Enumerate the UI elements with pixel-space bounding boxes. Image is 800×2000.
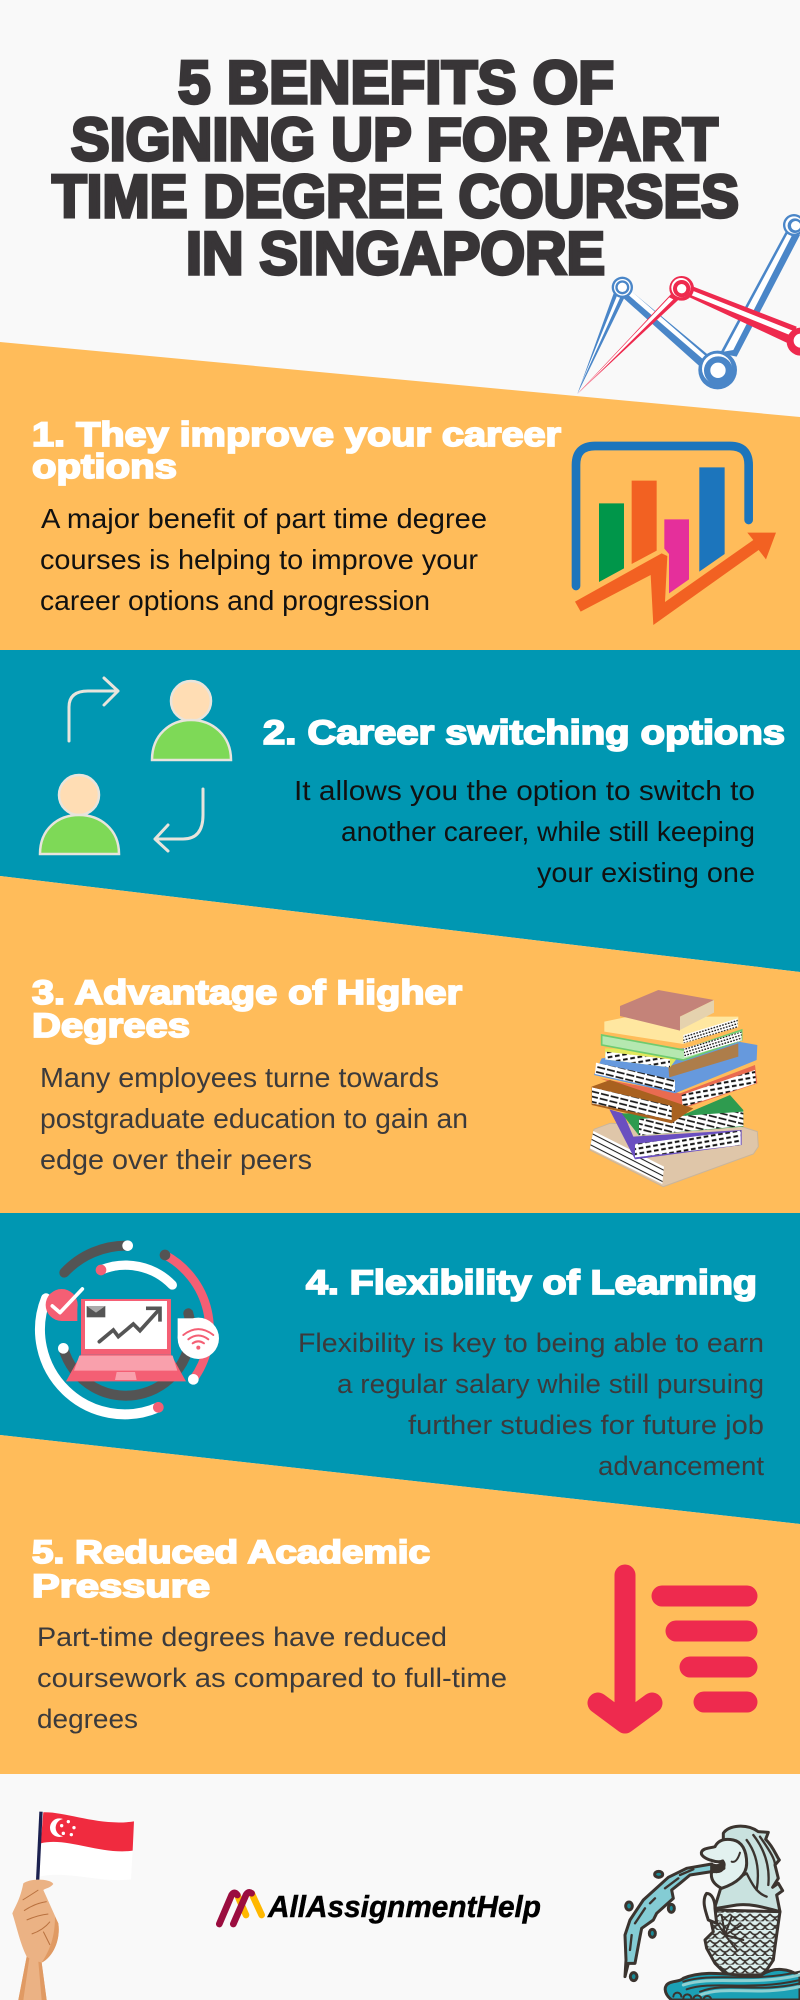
icon: logo mark (219, 1892, 262, 1924)
heading: benefit 5 (32, 1534, 430, 1604)
red nodes (669, 276, 800, 356)
waves (665, 1969, 800, 2000)
logo: AllAssignmentHelp (219, 1889, 541, 1924)
text: benefit 2 description (294, 775, 755, 888)
text: benefit 2 description: It allows you the option to switch to (294, 775, 755, 806)
panel: benefit 2 career switching (0, 650, 800, 972)
heading: benefit 3 (32, 974, 462, 1045)
footer (0, 1774, 800, 2000)
icon: laptop with growth chart (40, 1240, 219, 1414)
face (701, 1839, 747, 1888)
text: benefit 1 description: A major benefit of part time degree (41, 503, 487, 534)
mane (715, 1826, 783, 1912)
heading: benefit 1: 1. They improve your career (32, 416, 561, 454)
panel: benefit 4 flexibility (0, 1213, 800, 1524)
panel: benefit 1 career options (0, 342, 800, 650)
icon: stack of books (590, 990, 758, 1187)
icon: down arrow with shrinking bars (598, 1575, 747, 1723)
text: benefit 2 description: your existing one (537, 857, 755, 888)
text: benefit 3 description: Many employees turne towards (40, 1062, 439, 1093)
water stream (625, 1864, 712, 1977)
text: benefit 5 description: degrees (37, 1704, 138, 1734)
icon: wifi badge (178, 1318, 219, 1359)
heading: benefit 3: 3. Advantage of Higher (32, 974, 462, 1012)
text: benefit 1 description (40, 503, 487, 616)
title (52, 49, 739, 287)
fish body with scales (704, 1893, 780, 1975)
text: logo wordmark: AllAssignmentHelp (267, 1889, 541, 1924)
heading: benefit 4: 4. Flexibility of Learning (306, 1264, 757, 1302)
text: benefit 5 description: Part-time degrees have reduced (37, 1622, 447, 1652)
blue nodes (612, 214, 800, 389)
icon: bar chart with rising arrow (575, 446, 776, 625)
text: benefit 3 description: postgraduate education to gain an (40, 1103, 468, 1134)
icon: network line chart (577, 214, 800, 394)
heading: benefit 5: 5. Reduced Academic (32, 1534, 430, 1570)
heading: benefit 5: Pressure (32, 1568, 210, 1604)
water drops (626, 1871, 674, 1981)
text: benefit 4 description: further studies for future job (408, 1410, 764, 1440)
text: benefit 4 description (298, 1328, 765, 1481)
text: benefit 3 description: edge over their peers (40, 1144, 312, 1175)
panel: benefit 3 higher degrees (0, 876, 800, 1213)
heading: benefit 1: options (32, 448, 177, 486)
title: SIGNING UP FOR PART (71, 106, 718, 173)
heading: benefit 3: Degrees (32, 1007, 190, 1045)
icon: check badge (46, 1289, 82, 1321)
icon: Merlion statue (625, 1826, 800, 2000)
text: benefit 2 description: another career, while still keeping (341, 816, 755, 847)
text: benefit 3 description (40, 1062, 468, 1175)
text: benefit 1 description: career options and progression (40, 585, 430, 616)
heading: benefit 1 (32, 416, 561, 486)
text: benefit 5 description (37, 1622, 507, 1734)
text: benefit 5 description: coursework as compared to full-time (37, 1663, 507, 1693)
icon: hand holding Singapore flag (12, 1812, 134, 2000)
title: IN SINGAPORE (186, 220, 605, 287)
title: TIME DEGREE COURSES (52, 163, 739, 230)
text: benefit 4 description: advancement (598, 1451, 765, 1481)
text: benefit 4 description: a regular salary while still pursuing (337, 1369, 764, 1399)
icon: two people swapping (40, 678, 231, 854)
title: 5 BENEFITS OF (178, 49, 614, 116)
heading: benefit 2: 2. Career switching options (263, 714, 785, 752)
panel: benefit 5 reduced pressure (0, 1435, 800, 1774)
text: benefit 4 description: Flexibility is key to being able to earn (298, 1328, 764, 1358)
text: benefit 1 description: courses is helping to improve your (40, 544, 478, 575)
